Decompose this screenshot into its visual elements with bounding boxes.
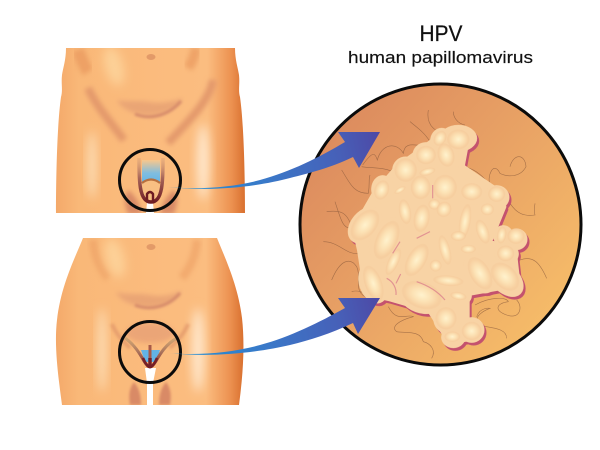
- male magnifier ring: [120, 150, 180, 210]
- wart body: [341, 125, 530, 348]
- female magnifier ring: [120, 322, 180, 382]
- arrow to skin from female: [168, 298, 380, 355]
- navel: [146, 54, 156, 60]
- wart creases: [387, 185, 445, 300]
- male torso illustration: [56, 44, 245, 214]
- female detail: vulva cross-section: [125, 338, 177, 367]
- navel: [146, 244, 156, 250]
- wart nodules: [345, 128, 525, 342]
- wart shadow edge: [343, 128, 532, 351]
- hairs on skin: [323, 110, 547, 358]
- arrow to skin from male: [168, 132, 380, 189]
- title: HPV: [420, 21, 463, 46]
- male detail: organ cross-section: [139, 158, 163, 202]
- female torso illustration: [56, 236, 243, 405]
- wart cluster: [341, 125, 532, 351]
- subtitle: human papillomavirus: [348, 48, 533, 67]
- magnified skin disc: [300, 84, 581, 365]
